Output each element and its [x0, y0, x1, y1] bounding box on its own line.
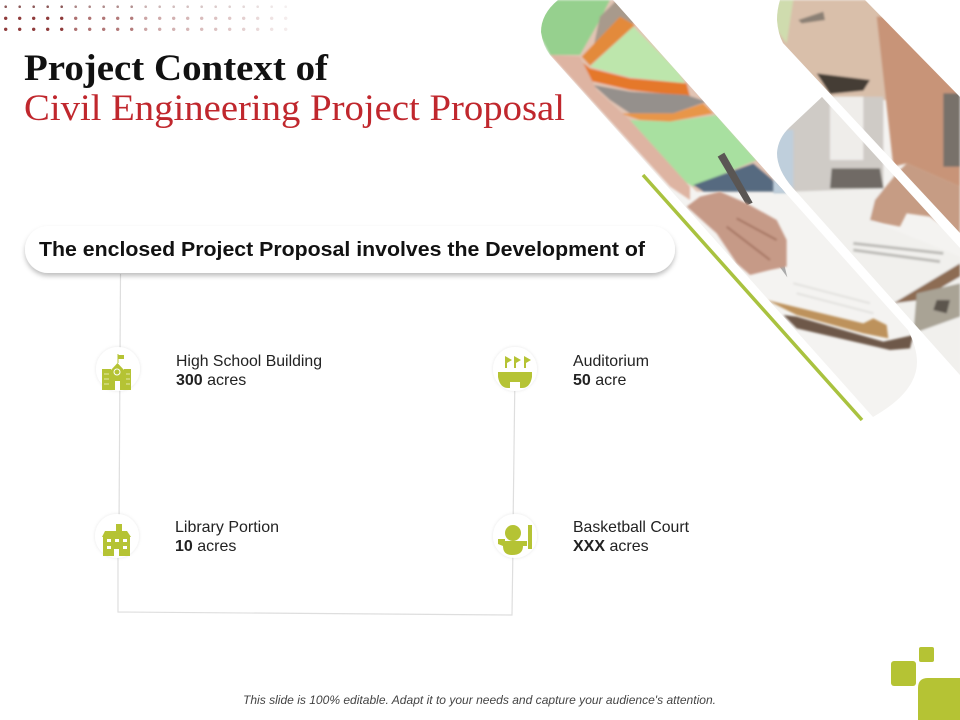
icon: library [95, 514, 139, 558]
text: high school building: 300 acres [176, 372, 246, 389]
photo: hands writing on clipboard [530, 0, 960, 430]
text: basketball court: XXX acres [573, 538, 649, 555]
decorative squares [891, 647, 960, 720]
text: auditorium: Auditorium [573, 353, 649, 370]
text: high school building: High School Building [176, 353, 322, 370]
footer note: This slide is 100% editable. Adapt it to your needs and capture your audience's attention. [243, 693, 716, 707]
icon: high school building [96, 347, 140, 391]
title: Project Context of [24, 48, 329, 89]
decorative dot grid [4, 5, 288, 31]
title [24, 48, 565, 129]
text: basketball court: Basketball Court [573, 519, 690, 536]
photo: clipboard [767, 283, 913, 350]
photo: pen [718, 153, 753, 205]
text: high school building [176, 353, 322, 389]
text: auditorium: 50 acre [573, 372, 626, 389]
banner pill [25, 226, 675, 273]
photo left band: high-vis shirt [530, 0, 797, 200]
accent diagonal line [643, 175, 862, 420]
text: library [175, 519, 279, 555]
title: Civil Engineering Project Proposal [24, 88, 565, 129]
text: auditorium [573, 353, 649, 389]
icon: auditorium [493, 347, 537, 391]
banner pill: The enclosed Project Proposal involves the Development of [39, 239, 645, 261]
photo: writing hand [687, 192, 787, 275]
connector lines [118, 274, 515, 615]
photo right: blurred worker and background [772, 0, 960, 332]
text: basketball court [573, 519, 690, 555]
text: library: 10 acres [175, 538, 236, 555]
text: library: Library Portion [175, 519, 279, 536]
icon: basketball court [493, 514, 537, 558]
